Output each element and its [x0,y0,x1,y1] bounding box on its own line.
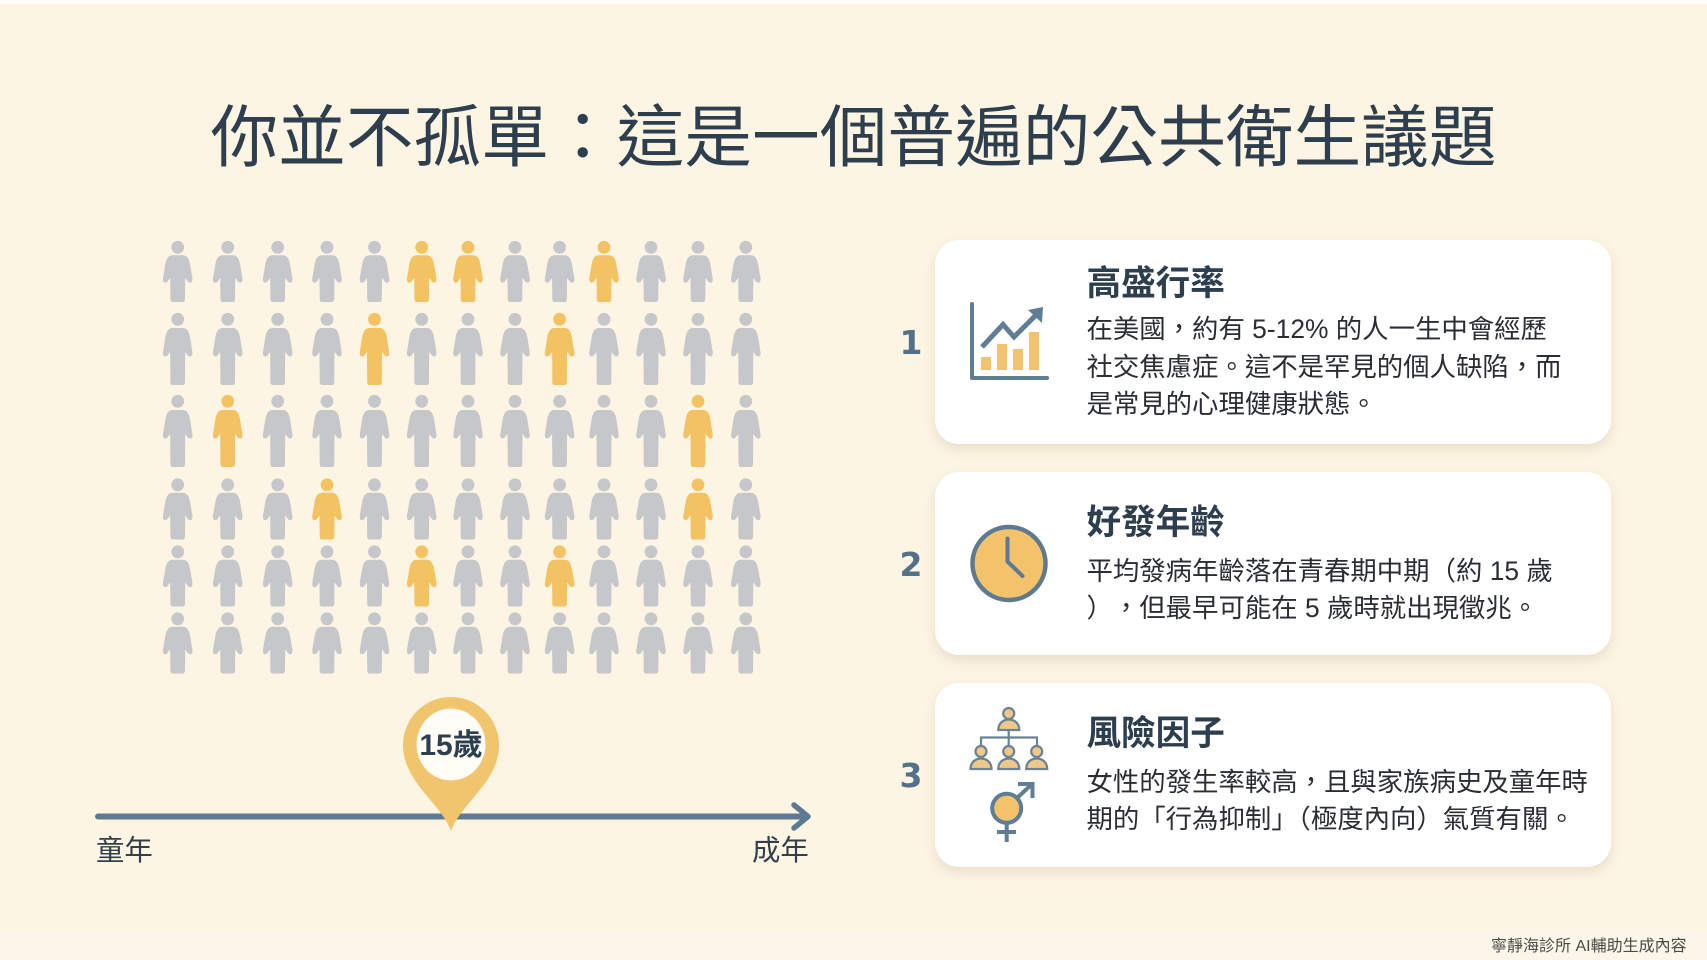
card 2 heading: 好發年齡 [1086,504,1225,542]
icon: family tree [970,708,1047,769]
card 2 body text [1086,556,1553,623]
people row 4 [163,478,761,540]
people row 5 [163,545,761,606]
card 1 body text: 社交焦慮症。這不是罕見的個人缺陷，而 [1086,352,1562,382]
panel: high prevalence [935,240,1611,444]
people row 2 [163,313,761,385]
people row 1 [163,241,761,302]
card 2 body text: ），但最早可能在 5 歲時就出現徵兆。 [1086,593,1538,623]
title: 你並不孤單：這是一個普遍的公共衛生議題 [210,101,1497,176]
card 1 body text: 在美國，約有 5-12% 的人一生中會經歷 [1086,314,1547,344]
icon: gender symbol [992,784,1032,842]
panel: risk factors [935,683,1611,867]
icon: location pin at 15 [403,697,499,831]
number 2: 2 [900,545,922,584]
card 1 body text [1086,314,1562,419]
card 3 body text: 女性的發生率較高，且與家族病史及童年時 [1086,767,1588,797]
panel: typical age of onset [935,472,1611,655]
card 1 heading: 高盛行率 [1086,265,1225,303]
number 3: 3 [900,756,922,795]
card 3 heading: 風險因子 [1086,715,1225,753]
arrow: timeline axis [98,805,808,828]
number 1: 1 [900,323,922,362]
card 3 body text: 期的「行為抑制」（極度內向）氣質有關。 [1086,804,1575,834]
people row 3 [163,395,761,467]
timeline label: adulthood: 成年 [752,835,809,867]
footer credit: 寧靜海診所 AI輔助生成內容 [1491,938,1687,955]
card 2 body text: 平均發病年齡落在青春期中期（約 15 歲 [1086,556,1553,586]
people row 6 [163,612,761,674]
timeline label: childhood: 童年 [96,835,153,867]
card 3 body text [1086,767,1588,834]
card 1 body text: 是常見的心理健康狀態。 [1086,389,1377,419]
icon: location pin at 15: 15歲 [419,729,483,762]
